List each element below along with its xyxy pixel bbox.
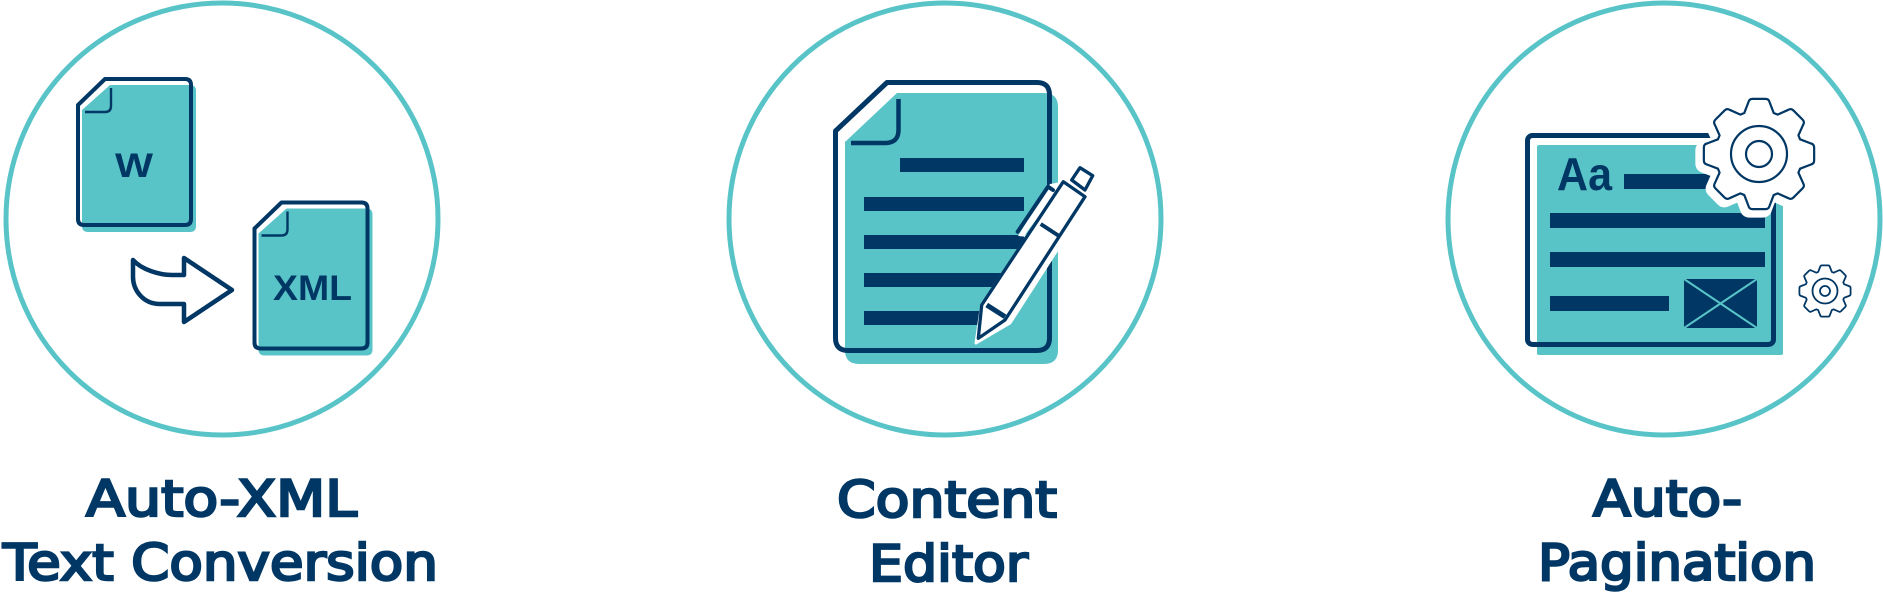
heading: Auto-Pagination: [1538, 470, 1816, 592]
icon: small gear: [1799, 265, 1851, 317]
panel: content editor: [729, 3, 1161, 593]
heading: Auto-XML Text Conversion: Text Conversion: [2, 534, 438, 592]
heading: Content Editor: Editor: [869, 535, 1028, 593]
panel: auto-XML text conversion: [2, 3, 438, 592]
heading: Auto-XML Text Conversion: Auto-XML: [86, 470, 357, 528]
heading: Content Editor: Content: [837, 471, 1057, 529]
heading: Content Editor: [837, 471, 1057, 593]
circle: content editor: [729, 3, 1161, 435]
panel: auto-pagination: [1448, 3, 1880, 592]
icon: page layout: [1528, 136, 1783, 355]
icon: large gear: [1701, 99, 1814, 212]
icon: document with text lines: [836, 82, 1058, 364]
icon: conversion arrow: [133, 258, 232, 322]
circle: auto-pagination: [1448, 3, 1880, 435]
circle: auto-XML: [6, 3, 438, 435]
icon: Word document: W: [115, 147, 154, 185]
heading: Auto-Pagination: Pagination: [1538, 534, 1816, 592]
heading: Auto-XML Text Conversion: [2, 470, 438, 592]
heading: Auto-Pagination: Auto-: [1593, 470, 1742, 528]
icon: XML document: XML: [273, 269, 352, 308]
icon: pen: [976, 168, 1093, 343]
icon: XML document: [254, 202, 372, 356]
icon: Word document: [78, 79, 196, 232]
icon: page layout: Aa: [1557, 148, 1612, 200]
